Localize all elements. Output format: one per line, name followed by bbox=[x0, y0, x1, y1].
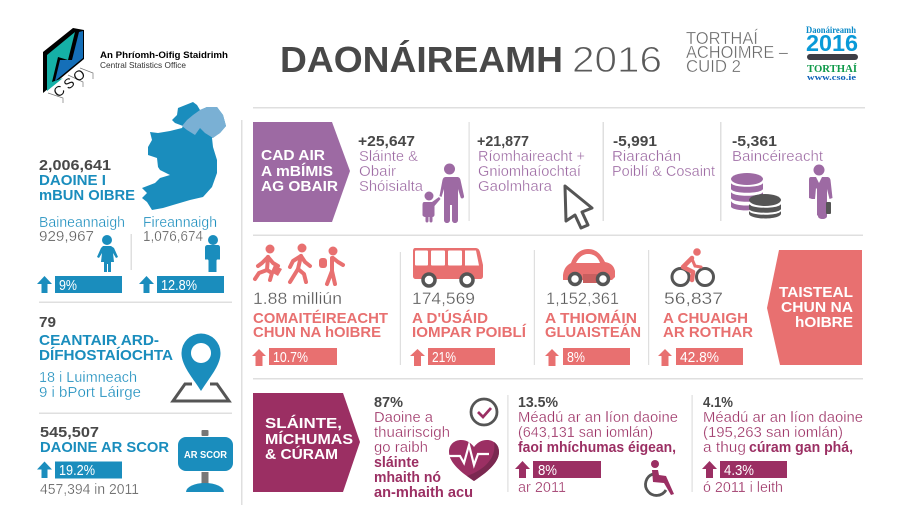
up arrow bbox=[37, 276, 52, 293]
icon: bus bbox=[413, 248, 483, 286]
logo text bbox=[100, 50, 228, 70]
text block: DÍFHOSTAÍOCHTA bbox=[39, 347, 173, 364]
heading arrow: AG OBAIR bbox=[261, 178, 338, 195]
up arrow bbox=[515, 461, 530, 478]
health sector: +25,647 bbox=[358, 134, 415, 150]
icon: businessman bbox=[809, 164, 832, 219]
map of Ireland bbox=[142, 102, 226, 210]
heading arrow: hOIBRE bbox=[795, 314, 853, 331]
banking sector bbox=[731, 134, 832, 219]
heading: 2,006,641 bbox=[39, 158, 111, 174]
heading: mBUN OIBRE bbox=[39, 187, 135, 204]
disability: ar 2011 bbox=[518, 479, 566, 496]
bar 8%: 8% bbox=[538, 462, 557, 479]
heading arrow bbox=[253, 393, 360, 492]
commuting: 1.88 milliún bbox=[253, 290, 342, 308]
heading arrow: TAISTEAL bbox=[779, 284, 853, 301]
disability bbox=[515, 395, 678, 496]
subtitle: ACHOIMRE – bbox=[686, 42, 788, 62]
unpaid care: cúram gan phá, bbox=[749, 439, 853, 456]
text block: 457,394 in 2011 bbox=[40, 481, 139, 498]
good health: 87% bbox=[374, 395, 403, 411]
good health: sláinte bbox=[374, 454, 419, 471]
up arrow bbox=[37, 462, 52, 478]
panel: unemployment blackspots bbox=[39, 315, 229, 401]
public transport bbox=[410, 248, 527, 366]
disability: (643,131 san iomlán) bbox=[518, 424, 653, 441]
up arrow bbox=[702, 461, 717, 478]
unpaid care: (195,263 san iomlán) bbox=[703, 424, 843, 441]
icon: retired sign bbox=[178, 430, 233, 492]
computing sector: Ríomhaireacht + bbox=[478, 148, 585, 165]
panel: health, disability and care bbox=[253, 393, 863, 501]
up arrow bbox=[658, 349, 672, 366]
bar 4.3% bbox=[720, 461, 787, 479]
male figures: Fireannaigh bbox=[143, 214, 217, 231]
unpaid care: 4.1% bbox=[703, 395, 733, 411]
banking sector: -5,361 bbox=[732, 134, 777, 150]
up arrow bbox=[139, 276, 154, 293]
census 2016 logo: www.cso.ie bbox=[807, 72, 856, 82]
text block bbox=[39, 315, 173, 401]
heading: DAOINE I bbox=[39, 172, 106, 189]
public administration sector: -5,991 bbox=[613, 134, 657, 150]
icon: CSO emblem bbox=[43, 28, 93, 103]
logo text: Central Statistics Office bbox=[100, 60, 186, 70]
good health: mhaith nó bbox=[374, 469, 441, 486]
bar 4.3%: 4.3% bbox=[724, 462, 754, 479]
commuting: CHUN NA hOIBRE bbox=[253, 324, 381, 341]
text block: CEANTAIR ARD- bbox=[39, 332, 159, 349]
subtitle: CUID 2 bbox=[686, 56, 741, 76]
health sector: Shóisialta bbox=[359, 178, 424, 195]
subtitle: TORTHAÍ bbox=[686, 28, 758, 48]
text block: 18 i Luimneach bbox=[39, 369, 137, 386]
logo text: An Phríomh-Oifig Staidrimh bbox=[100, 50, 228, 61]
public transport: 174,569 bbox=[412, 290, 475, 308]
up arrow bbox=[252, 349, 266, 366]
unpaid care: ó 2011 i leith bbox=[703, 479, 783, 496]
bar 10.7%: 10.7% bbox=[273, 349, 308, 366]
good health: Daoine a bbox=[374, 409, 434, 426]
bar 42.8%: 42.8% bbox=[680, 349, 719, 366]
panel: what we work at bbox=[253, 122, 832, 228]
icon: man bbox=[205, 235, 220, 272]
good health: an-mhaith acu bbox=[374, 484, 473, 501]
female figures: 929,967 bbox=[39, 228, 94, 245]
icon: map pin bbox=[173, 334, 229, 401]
icon: car bbox=[563, 249, 615, 284]
icon: retired sign: AR SCOR bbox=[184, 449, 227, 461]
bar 8%: 8% bbox=[567, 349, 585, 366]
car drivers: 1,152,361 bbox=[546, 290, 619, 308]
male figures: 1,076,674 bbox=[143, 228, 203, 245]
text block: DAOINE AR SCOR bbox=[40, 439, 169, 456]
computing sector: Gniomhaíochtaí bbox=[478, 163, 582, 180]
icon: woman bbox=[97, 235, 118, 272]
good health bbox=[374, 395, 499, 501]
panel: travel to work bbox=[252, 244, 862, 366]
CSO logo bbox=[43, 28, 228, 103]
cyclists: AR ROTHAR bbox=[663, 324, 753, 341]
icon: wheelchair bbox=[646, 460, 674, 495]
health sector: Sláinte & bbox=[359, 148, 418, 165]
unpaid care: a thug bbox=[703, 439, 746, 456]
good health: thuairiscigh bbox=[374, 424, 450, 441]
cyclists bbox=[658, 248, 753, 366]
census 2016 logo: Daonáireamh bbox=[806, 25, 856, 35]
disability: 13.5% bbox=[518, 395, 558, 411]
heading arrow: SLÁINTE, bbox=[265, 415, 342, 432]
health sector: Obair bbox=[359, 163, 396, 180]
disability: faoi mhíchumas éigean, bbox=[518, 439, 676, 456]
public administration sector bbox=[612, 134, 716, 180]
icon: cyclist bbox=[672, 248, 714, 286]
title: 2016 bbox=[572, 39, 662, 80]
heading arrow: & CÚRAM bbox=[265, 445, 338, 463]
icon: adult and child bbox=[422, 164, 464, 223]
cyclists: A CHUAIGH bbox=[663, 310, 748, 327]
health sector bbox=[358, 134, 464, 223]
good health: go raibh bbox=[374, 439, 428, 456]
panel: people at work bbox=[37, 102, 226, 294]
male figures bbox=[130, 214, 224, 294]
bar 12.8%: 12.8% bbox=[161, 277, 197, 294]
public administration sector: Riarachán bbox=[612, 148, 681, 165]
car drivers bbox=[545, 249, 641, 366]
heading arrow bbox=[767, 250, 862, 365]
up arrow bbox=[410, 349, 425, 366]
computing sector: +21,877 bbox=[477, 134, 529, 150]
icon: check mark bbox=[471, 399, 497, 425]
female figures: Baineannaigh bbox=[39, 214, 125, 231]
commuting bbox=[252, 244, 388, 366]
bar 19.2% bbox=[55, 462, 122, 479]
up arrow bbox=[545, 349, 559, 366]
computing sector bbox=[477, 134, 592, 228]
text block: 545,507 bbox=[40, 425, 99, 441]
bar 9%: 9% bbox=[59, 277, 77, 294]
cyclists: 56,837 bbox=[664, 290, 723, 308]
bar 8% bbox=[533, 461, 601, 479]
female figures bbox=[37, 214, 125, 294]
text block: 9 i bPort Láirge bbox=[39, 384, 141, 401]
title: DAONÁIREAMH bbox=[280, 39, 563, 80]
public transport: IOMPAR POIBLÍ bbox=[412, 324, 527, 341]
icon: CSO emblem: CSO bbox=[50, 66, 88, 100]
icon: heart bbox=[449, 440, 499, 481]
panel: retired people bbox=[37, 425, 233, 498]
census 2016 logo bbox=[806, 25, 858, 82]
commuting: COMAITÉIREACHT bbox=[253, 310, 388, 327]
icon: coins bbox=[731, 173, 781, 218]
census 2016 logo: TORTHAÍ bbox=[807, 63, 857, 75]
public transport: A D'ÚSÁID bbox=[412, 309, 488, 327]
disability: Méadú ar an líon daoine bbox=[518, 409, 678, 426]
census 2016 logo: 2016 bbox=[806, 30, 858, 56]
bar 21%: 21% bbox=[432, 349, 456, 366]
heading bbox=[39, 158, 135, 204]
banking sector: Baincéireacht bbox=[732, 148, 824, 165]
unpaid care bbox=[702, 395, 863, 496]
icon: cursor bbox=[565, 186, 592, 228]
subtitle bbox=[686, 28, 788, 76]
bar 19.2%: 19.2% bbox=[59, 462, 95, 479]
car drivers: GLUAISTEÁN bbox=[545, 324, 641, 341]
heading arrow bbox=[253, 122, 350, 222]
public administration sector: Poiblí & Cosaint bbox=[612, 163, 716, 180]
heading arrow: A mBÍMIS bbox=[261, 163, 333, 180]
car drivers: A THIOMÁIN bbox=[545, 310, 637, 327]
text block bbox=[40, 425, 169, 498]
heading arrow: CAD AIR bbox=[261, 147, 325, 164]
heading arrow: CHUN NA bbox=[781, 299, 853, 316]
computing sector: Gaolmhara bbox=[478, 178, 553, 195]
icon: walkers bbox=[255, 244, 343, 284]
heading arrow: MÍCHUMAS bbox=[265, 431, 353, 448]
unpaid care: Méadú ar an líon daoine bbox=[703, 409, 863, 426]
text block: 79 bbox=[39, 315, 56, 331]
